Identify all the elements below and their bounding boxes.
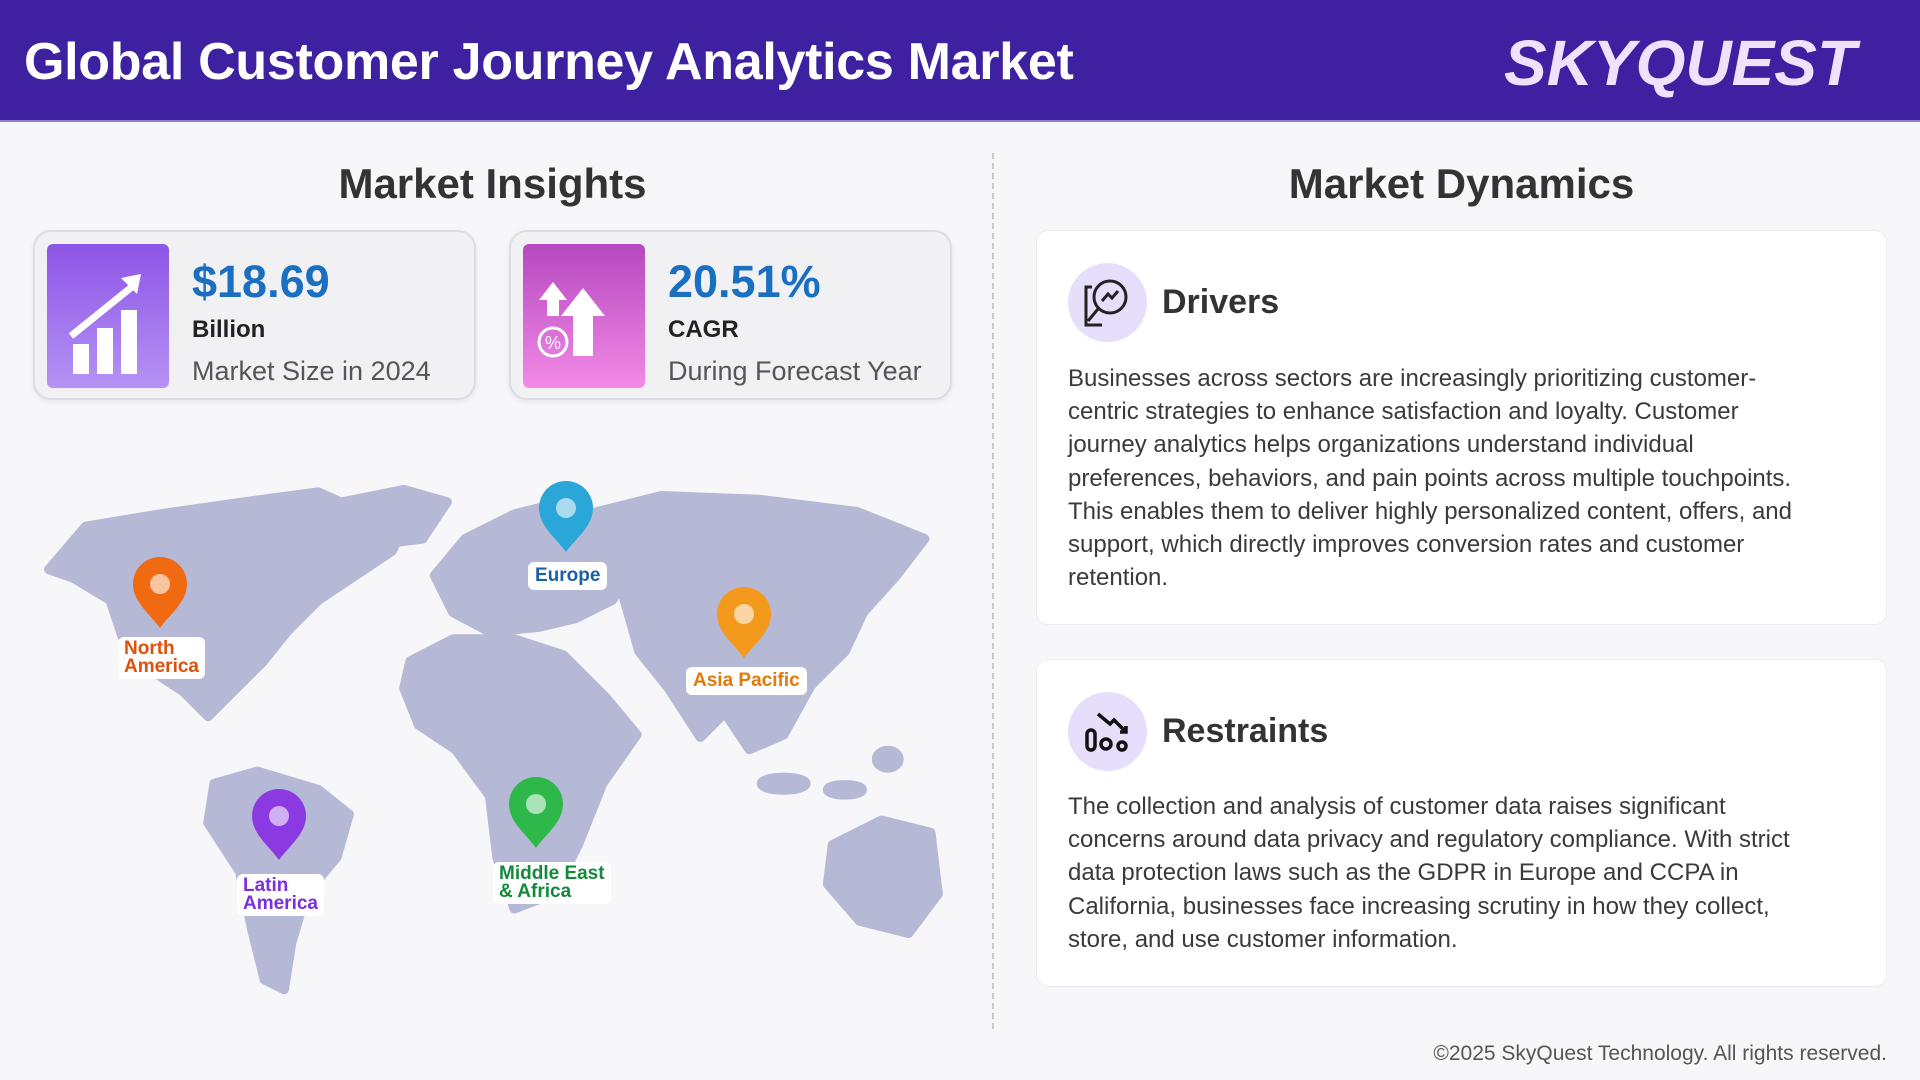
text: North	[124, 638, 175, 659]
pin: middle east & africa	[494, 777, 605, 904]
card: CAGR	[509, 230, 952, 400]
heading: market insights: Market Insights	[338, 160, 647, 207]
text: restraints: California, businesses face increasing scrutiny in how they collect,	[1068, 893, 1770, 920]
text: restraints: The collection and analysis of customer data raises significant	[1068, 793, 1726, 820]
text: restraints: concerns around data privacy and regulatory compliance. With strict	[1068, 826, 1790, 853]
header bar	[0, 0, 1920, 122]
text: Europe	[535, 565, 600, 586]
icon: arrows up: %	[545, 333, 561, 353]
panel: restraints	[1036, 659, 1887, 987]
text: drivers: retention.	[1068, 564, 1168, 591]
text: America	[124, 656, 199, 677]
card: market size	[33, 230, 476, 400]
text: drivers: journey analytics helps organizations understand individual	[1068, 431, 1694, 458]
text: drivers	[1067, 365, 1792, 591]
pin: latin america	[237, 789, 324, 916]
icon: restraints	[1068, 692, 1147, 771]
text: drivers: centric strategies to enhance satisfaction and loyalty. Customer	[1068, 398, 1739, 425]
panel: drivers	[1036, 230, 1887, 625]
text: & Africa	[499, 881, 571, 902]
card: CAGR: CAGR	[668, 316, 739, 343]
text: restraints: store, and use customer information.	[1068, 926, 1458, 953]
pin: europe	[528, 481, 607, 590]
card: CAGR: During Forecast Year	[668, 356, 922, 386]
text: drivers: preferences, behaviors, and pain points across multiple touchpoints.	[1068, 465, 1791, 492]
text: restraints	[1068, 793, 1790, 953]
text: America	[243, 893, 318, 914]
text: drivers: support, which directly improves conversion rates and customer	[1068, 531, 1744, 558]
text: Latin	[243, 875, 288, 896]
footer: ©2025 SkyQuest Technology. All rights reserved.	[1433, 1042, 1887, 1065]
divider	[992, 153, 994, 1029]
text: Middle East	[499, 863, 605, 884]
value: $18.69	[192, 256, 330, 307]
heading: Restraints	[1162, 712, 1328, 750]
text: drivers: This enables them to deliver highly personalized content, offers, and	[1068, 498, 1792, 525]
text: Asia Pacific	[693, 670, 800, 691]
card: market size: Billion	[192, 316, 265, 343]
heading: market dynamics: Market Dynamics	[1289, 160, 1634, 207]
value: 20.51%	[668, 256, 821, 307]
pin: asia pacific	[686, 587, 807, 695]
card: market size: Market Size in 2024	[192, 356, 431, 386]
heading: Drivers	[1162, 283, 1279, 321]
text: drivers: Businesses across sectors are increasingly prioritizing customer-	[1068, 365, 1756, 392]
title: Global Customer Journey Analytics Market	[24, 33, 1073, 91]
icon: arrows up	[523, 244, 645, 388]
icon: drivers	[1068, 263, 1147, 342]
icon: growth chart	[47, 244, 169, 388]
pin: north america	[118, 557, 205, 679]
world map	[44, 484, 943, 994]
logo: SKYQUEST	[1504, 27, 1856, 99]
text: restraints: data protection laws such as the GDPR in Europe and CCPA in	[1068, 859, 1739, 886]
